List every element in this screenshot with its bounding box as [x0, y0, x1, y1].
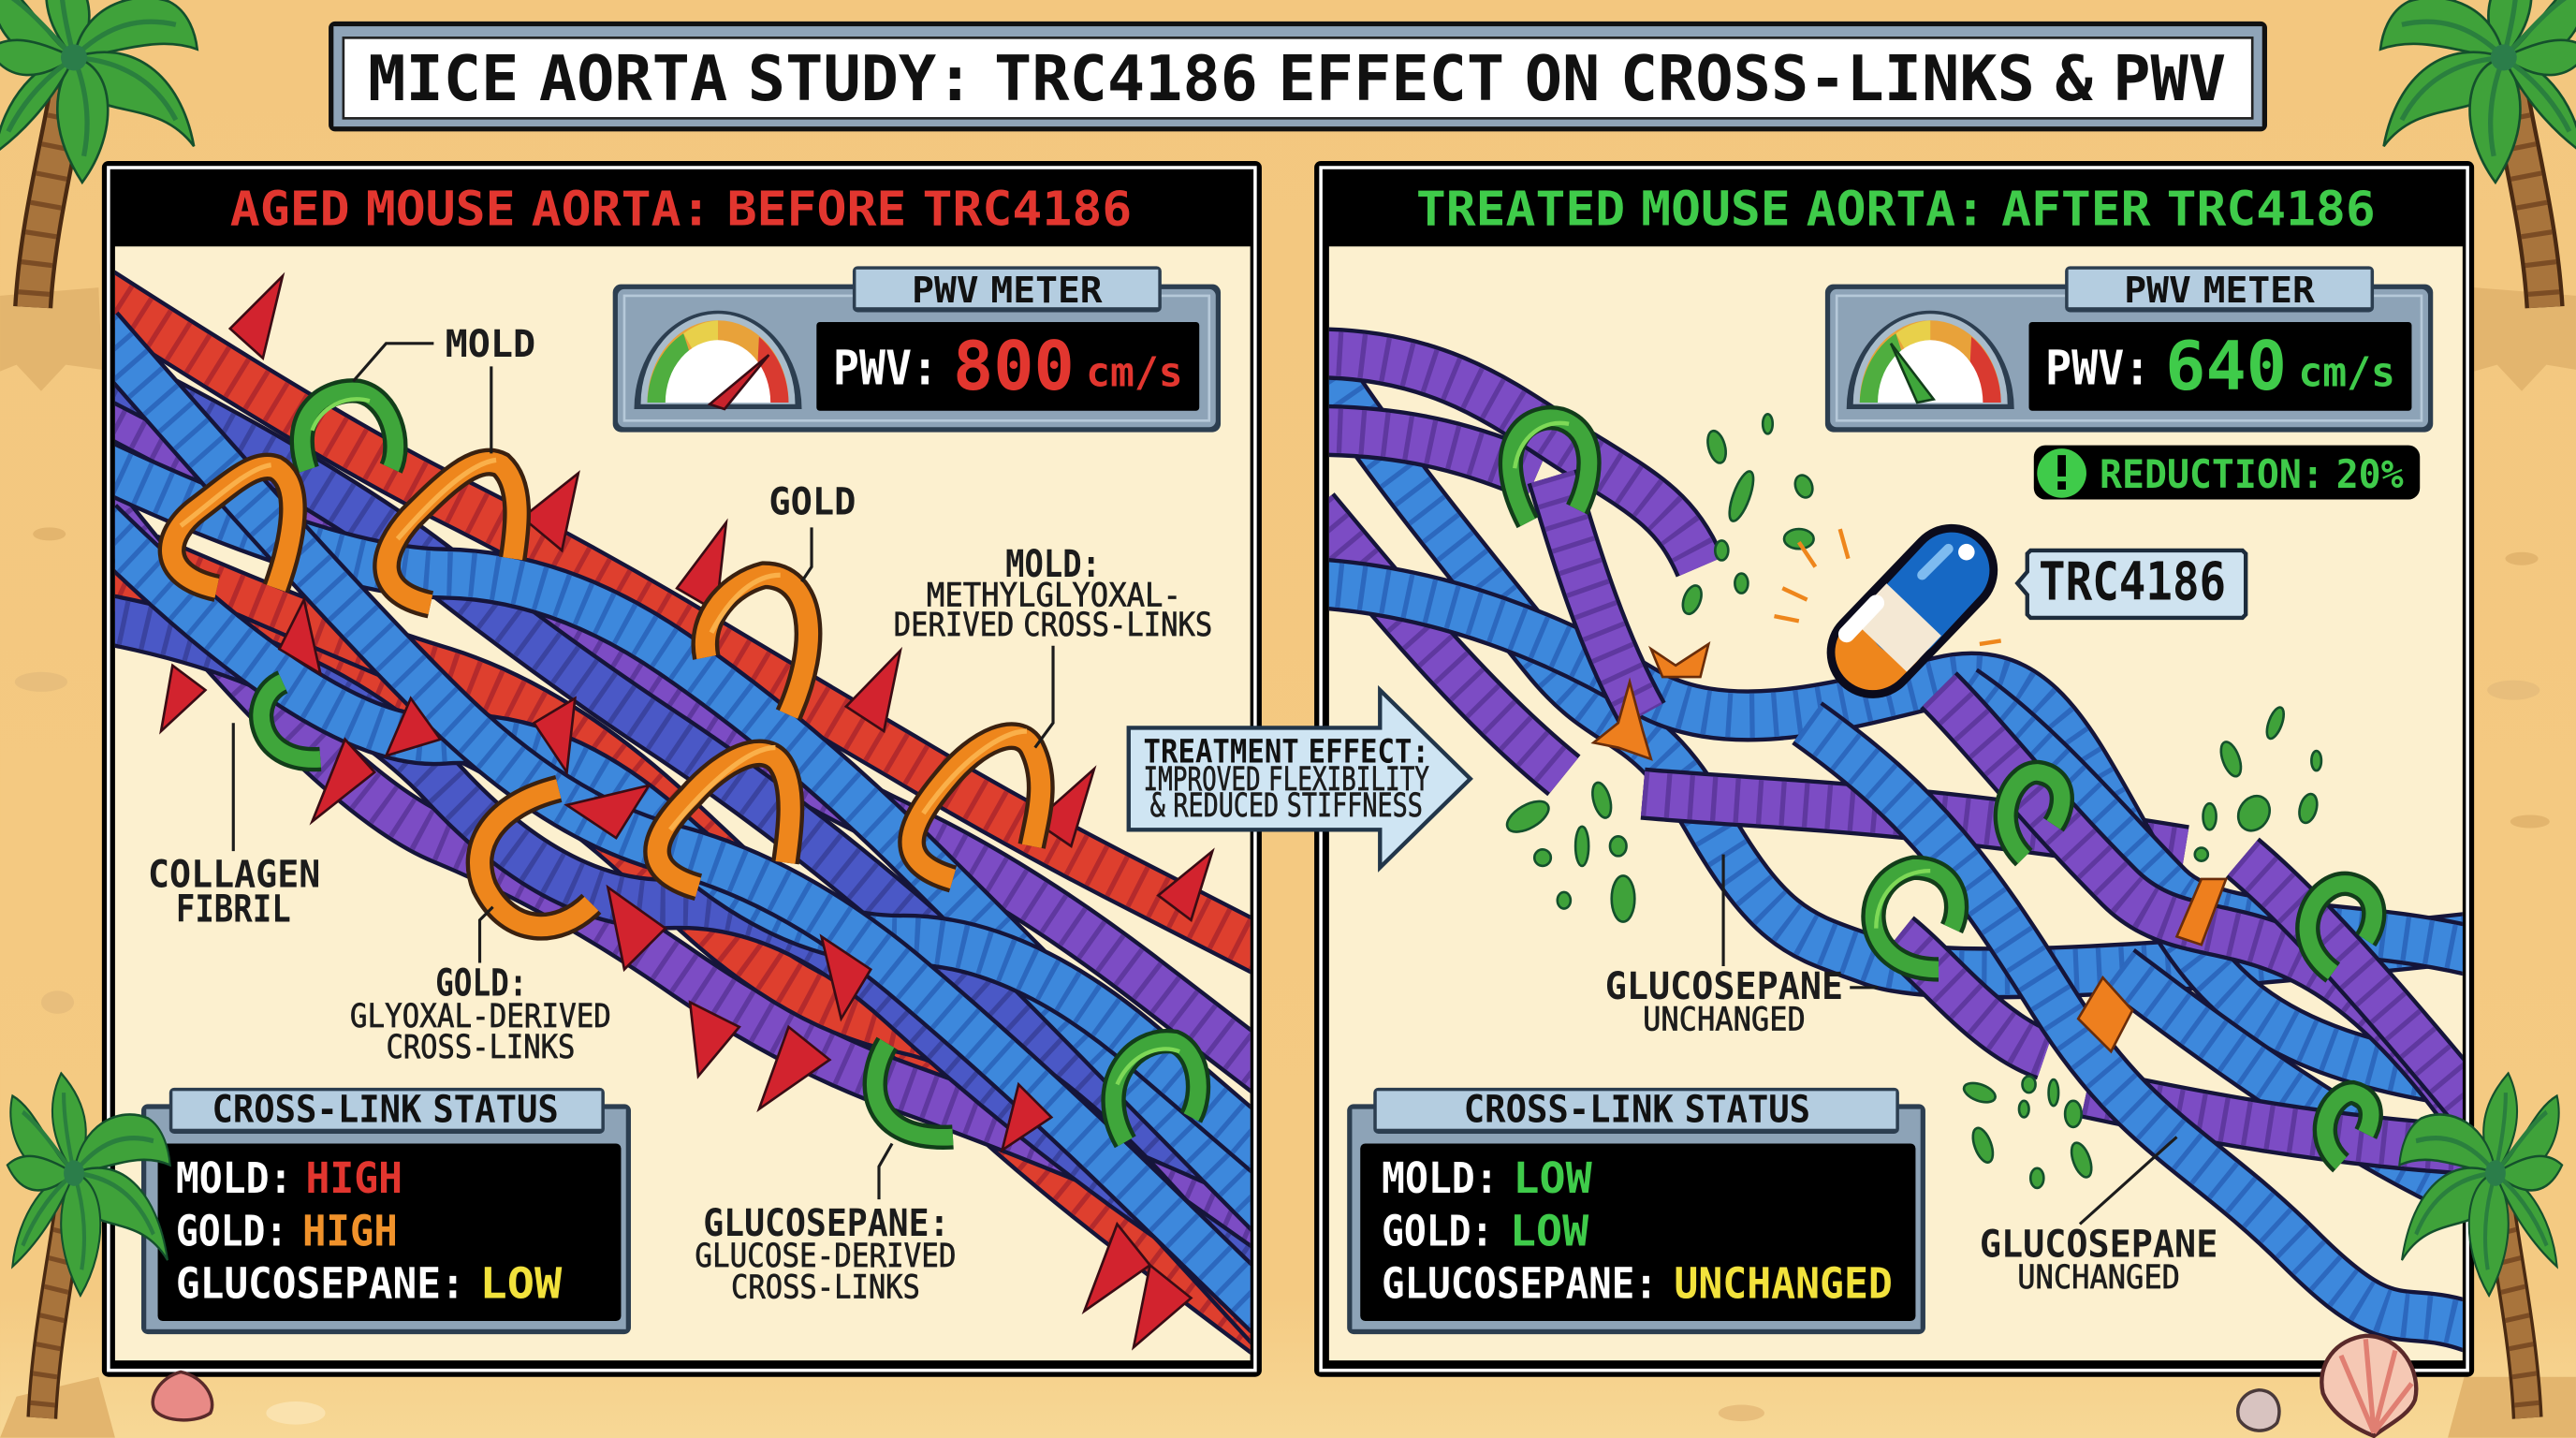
palm tree: bottom right: [2399, 1073, 2562, 1418]
arrow: treatment effect: [1129, 690, 1471, 868]
label: mold top: MOLD: [446, 322, 535, 366]
palm tree: top left: [0, 0, 198, 307]
label: collagen fibril: [148, 723, 320, 932]
label: glucosepane: GLUCOSE-DERIVED: [695, 1237, 956, 1275]
icon: scallop shell: [2321, 1336, 2416, 1436]
label: mold methylglyoxal: METHYLGLYOXAL-: [927, 577, 1181, 615]
label: glucosepane unchanged upper: [1605, 855, 1878, 1038]
gauge: red needle: [634, 311, 802, 409]
PWV meter: before: PWV METER: [912, 270, 1103, 312]
palm tree: bottom left: [7, 1073, 170, 1418]
label: gold glyoxal: [350, 907, 611, 1066]
icon: pink shell: [153, 1372, 212, 1420]
label: TRC4186 tag: TRC4186: [2039, 552, 2226, 613]
cross-link status: before: CROSS-LINK STATUS: [212, 1088, 559, 1132]
cross-link status: before: [141, 1088, 631, 1334]
label: gold glyoxal: GLYOXAL-DERIVED: [350, 997, 611, 1035]
cross-link status: before: GLUCOSEPANE:: [176, 1258, 465, 1308]
PWV value: 640 cm/s: [2045, 327, 2395, 405]
label: mold methylglyoxal: DERIVED CROSS-LINKS: [894, 606, 1212, 644]
label: glucosepane unchanged lower: GLUCOSEPANE: [1980, 1223, 2217, 1267]
PWV value: 640 cm/s: 640: [2165, 327, 2287, 405]
label: gold top: [768, 479, 856, 581]
PWV meter: before: [613, 266, 1221, 433]
panel header: after: TREATED MOUSE AORTA: AFTER TRC4186: [1416, 182, 2376, 237]
label: glucosepane: [695, 1143, 956, 1306]
cross-link status: after: MOLD:: [1382, 1153, 1499, 1203]
palm tree: top right: [2380, 0, 2576, 307]
cross-link status: before: MOLD:: [176, 1153, 292, 1203]
sand shadows and specks: [0, 287, 2576, 1438]
arrow: treatment effect: & REDUCED STIFFNESS: [1150, 786, 1423, 825]
label: glucosepane unchanged upper: UNCHANGED: [1643, 1000, 1806, 1038]
reduction badge: REDUCTION: 20%: [2100, 451, 2404, 497]
label: gold glyoxal: CROSS-LINKS: [386, 1028, 575, 1066]
cross-link status: after: LOW: [1513, 1153, 1592, 1203]
PWV value: 640 cm/s: cm/s: [2298, 348, 2395, 396]
cross-link status: before: HIGH: [305, 1153, 402, 1203]
cross-link status: before: HIGH: [302, 1206, 398, 1255]
PWV value: 800 cm/s: 800: [953, 327, 1075, 405]
label: mold methylglyoxal: [894, 542, 1212, 748]
title text: MICE AORTA STUDY: TRC4186 EFFECT ON CROSS-LINKS & PWV: [368, 42, 2226, 115]
PWV meter: after: PWV METER: [2124, 270, 2316, 312]
cross-link status: before: GOLD:: [176, 1206, 287, 1255]
label: glucosepane: GLUCOSEPANE:: [703, 1201, 949, 1245]
label: collagen fibril: FIBRIL: [176, 888, 291, 932]
label: collagen fibril: COLLAGEN: [148, 853, 320, 897]
cross-link status: after: UNCHANGED: [1674, 1258, 1893, 1308]
arrow: treatment effect: IMPROVED FLEXIBILITY: [1144, 760, 1429, 799]
collagen bundle with thorns and hooks: [98, 276, 1273, 1347]
title banner: [329, 22, 2267, 131]
panel: aged mouse aorta before TRC4186: [98, 161, 1273, 1377]
label: gold glyoxal: GOLD:: [435, 961, 527, 1005]
label: mold leader: [490, 366, 492, 453]
label: mold top: [353, 322, 535, 381]
icon: TRC4186 capsule: [1774, 529, 2001, 653]
PWV value: 800 cm/s: cm/s: [1086, 348, 1183, 396]
cross-link status: after: CROSS-LINK STATUS: [1464, 1088, 1810, 1132]
cross-link status: after: GLUCOSEPANE:: [1382, 1258, 1658, 1308]
cross-link status: before: LOW: [480, 1258, 563, 1308]
gauge: green needle: [1847, 311, 2014, 409]
arrow: treatment effect: TREATMENT EFFECT:: [1144, 732, 1429, 770]
label: glucosepane unchanged lower: UNCHANGED: [2017, 1258, 2180, 1297]
label: glucosepane: CROSS-LINKS: [731, 1268, 920, 1306]
PWV value: 800 cm/s: PWV:: [833, 342, 938, 397]
label: glucosepane unchanged lower: [1980, 1137, 2217, 1297]
cross-link status: after: GOLD:: [1382, 1206, 1493, 1255]
label: glucosepane unchanged upper: GLUCOSEPANE: [1605, 964, 1843, 1008]
cross-link status: after: [1347, 1088, 1925, 1334]
icon: small grey shell: [2238, 1390, 2279, 1431]
cross-link status: after: LOW: [1510, 1206, 1589, 1255]
panel: treated mouse aorta after TRC4186: [1314, 161, 2481, 1377]
PWV meter: after: [1825, 266, 2433, 433]
collagen bundle with broken links: [1314, 353, 2481, 1331]
panel header: before: AGED MOUSE AORTA: BEFORE TRC4186: [230, 182, 1132, 237]
label: gold top: GOLD: [768, 479, 856, 523]
icon: exclamation: [2037, 448, 2086, 498]
label: mold methylglyoxal: MOLD:: [1005, 542, 1101, 586]
PWV value: 640 cm/s: PWV:: [2045, 342, 2150, 397]
PWV value: 800 cm/s: [833, 327, 1183, 405]
